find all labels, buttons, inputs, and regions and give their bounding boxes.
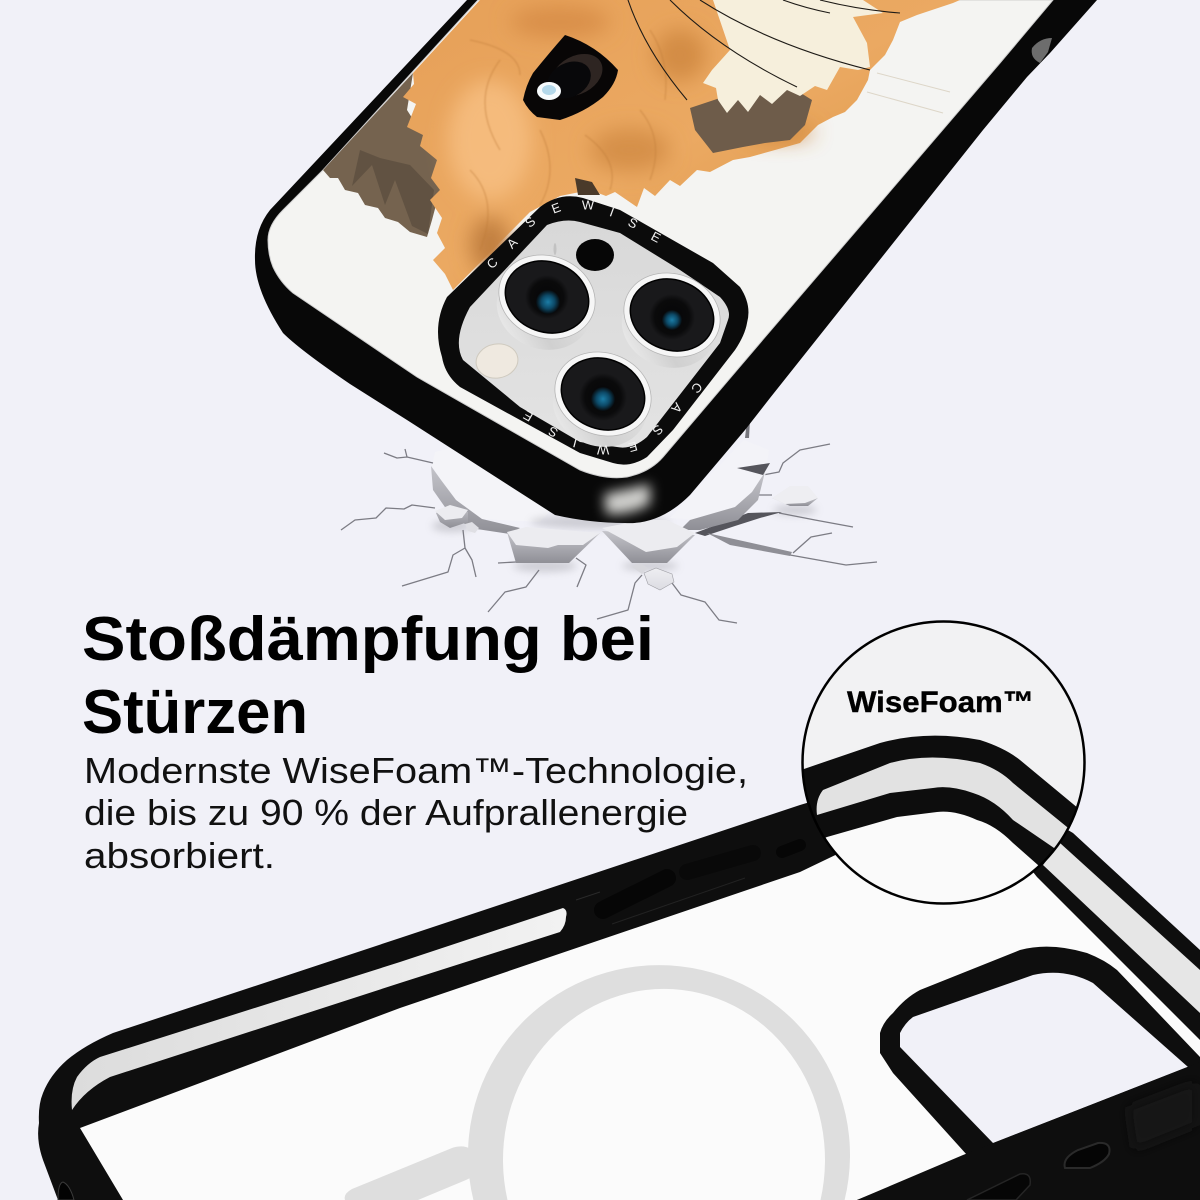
- camera cutout frame: [880, 947, 1200, 1155]
- dark crack wedge right: [695, 512, 782, 536]
- fox fur: orange body: [403, 0, 960, 290]
- camera cutout opening: [900, 973, 1188, 1143]
- ring lettering: bottom: CASEWISE: [520, 379, 706, 457]
- clear case: frame and interior: [38, 790, 1200, 1200]
- microphone: [554, 243, 556, 255]
- heading: Stürzen: [82, 678, 308, 747]
- bumper glint: [604, 484, 650, 514]
- centre-left chunk: [507, 527, 600, 563]
- body text: Modernste WiseFoam™-Technologie,: [84, 750, 748, 791]
- body text: die bis zu 90 % der Aufprallenergie: [84, 792, 688, 833]
- centre-right chunk: [602, 520, 695, 563]
- phone case: outer black bumper: [255, 0, 1097, 523]
- body text: [84, 750, 748, 876]
- fox fur: left brown patch: [323, 73, 440, 237]
- lens: bottom: [541, 339, 663, 460]
- rim strip right: [1043, 843, 1200, 1013]
- heading: [82, 605, 654, 747]
- tapered crack right: [707, 533, 792, 556]
- side buttons: [576, 845, 800, 924]
- frame outer black: [38, 790, 1200, 1200]
- rim strip left: [72, 908, 567, 1110]
- small left chunk: [435, 505, 479, 533]
- clear interior: [80, 830, 1200, 1200]
- MagSafe ring: [468, 965, 850, 1200]
- fox fur: cream patch: [703, 0, 883, 113]
- callout: WiseFoam magnifier: [795, 622, 1090, 911]
- fox fur: tonal shading: [448, 6, 814, 273]
- ring lettering: top: CASEWISE: [484, 198, 664, 272]
- crack lines: [341, 444, 877, 623]
- right plate top: [670, 440, 769, 520]
- magnifier outline: [802, 622, 1084, 904]
- fox eye: [523, 35, 618, 120]
- heading: Stoßdämpfung bei: [82, 605, 654, 674]
- wall cracks under the impact: [341, 420, 877, 623]
- camera plateau: [459, 221, 729, 448]
- fox fur: strands: [470, 30, 666, 218]
- callout label: WiseFoam™: [847, 686, 1034, 719]
- magnifier background: [802, 622, 1084, 904]
- lidar sensor: [576, 239, 614, 271]
- fox fur: right brown band: [690, 90, 812, 153]
- lens: top right: [610, 260, 732, 381]
- fox fur: dark tuft above ring: [575, 178, 600, 195]
- small bottom chunks: [632, 563, 674, 590]
- side button on bumper: [1032, 38, 1052, 63]
- lower edge port: [1065, 1143, 1110, 1168]
- MagSafe lower bar: [345, 1146, 480, 1200]
- lower edge button: [967, 1174, 1030, 1200]
- left plate top: [432, 440, 560, 522]
- phone case back glass: [268, 0, 1053, 478]
- left edge speaker slot: [58, 1182, 74, 1200]
- flash: [473, 341, 521, 381]
- left plate rim: [431, 466, 520, 534]
- lens: top left: [485, 242, 607, 363]
- body text: absorbiert.: [84, 835, 275, 876]
- magnified frame: [804, 736, 1076, 866]
- fox artwork: [323, 0, 960, 290]
- right plate rim: [680, 472, 765, 530]
- camera bumper ring: [438, 196, 748, 465]
- thick crack near right plate: [745, 420, 750, 438]
- fox pale whiskers: [867, 73, 950, 113]
- dark wedge on right plate: [737, 463, 770, 475]
- small right chunk: [772, 486, 818, 506]
- fox whiskers: [628, 0, 900, 100]
- lower band sheen: [1128, 1082, 1196, 1150]
- lower right frame band: [857, 1062, 1200, 1200]
- crack shadows: [432, 505, 817, 572]
